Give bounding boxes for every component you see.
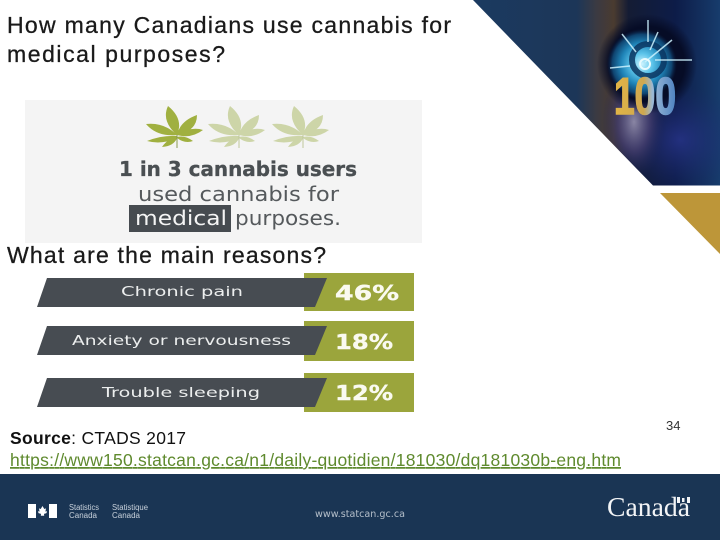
footer band <box>0 474 720 540</box>
agency name, French: Statistique <box>112 503 149 512</box>
emblem number: 100 <box>614 68 676 126</box>
title: How many Canadians use cannabis for <box>7 12 451 38</box>
medical highlight: medical <box>135 206 227 230</box>
bar: chronic pain 46%: 46% <box>335 281 399 305</box>
website: www.statcan.gc.ca <box>315 509 405 520</box>
bar: trouble sleeping 12%: 12% <box>335 381 393 405</box>
icon: wordmark flag <box>677 497 690 503</box>
medical highlight <box>129 205 231 232</box>
bar: anxiety or nervousness 18% <box>37 321 414 361</box>
icon: cannabis leaf, faded <box>208 106 265 148</box>
bar: anxiety or nervousness 18%: 18% <box>335 330 393 354</box>
title second line: medical purposes? <box>7 41 225 67</box>
footer band: Canada <box>69 511 98 520</box>
Canada wordmark: Canada <box>607 492 690 522</box>
bar: chronic pain 46%: Chronic pain <box>121 284 243 300</box>
icon: cannabis leaf, faded <box>272 106 329 148</box>
icon: Canadian flag <box>28 504 57 518</box>
bar: trouble sleeping 12% <box>37 373 414 412</box>
statistic line 2: used cannabis for <box>138 182 340 206</box>
panel: 1 in 3 cannabis users <box>25 100 422 243</box>
statistic line 3: purposes. <box>235 206 341 230</box>
subheading: What are the main reasons? <box>7 242 326 268</box>
source line: Source: CTADS 2017 <box>10 428 186 448</box>
bar: anxiety or nervousness 18%: Anxiety or nervousness <box>72 333 291 349</box>
icon: cannabis leaf, highlighted <box>146 106 203 148</box>
agency name, English: Statistics <box>69 503 99 512</box>
corner banner: centennial emblem <box>473 0 720 195</box>
source link: https://www150.statcan.gc.ca/n1/daily-quotidien/181030/dq181030b-eng.htm <box>10 450 621 470</box>
bar: chronic pain 46% <box>37 273 414 311</box>
bar: trouble sleeping 12%: Trouble sleeping <box>101 385 260 401</box>
statistic headline: 1 in 3 cannabis users <box>119 157 357 181</box>
gold corner triangle <box>660 193 720 254</box>
footer band: Canada <box>112 511 141 520</box>
page number: 34 <box>666 418 680 433</box>
